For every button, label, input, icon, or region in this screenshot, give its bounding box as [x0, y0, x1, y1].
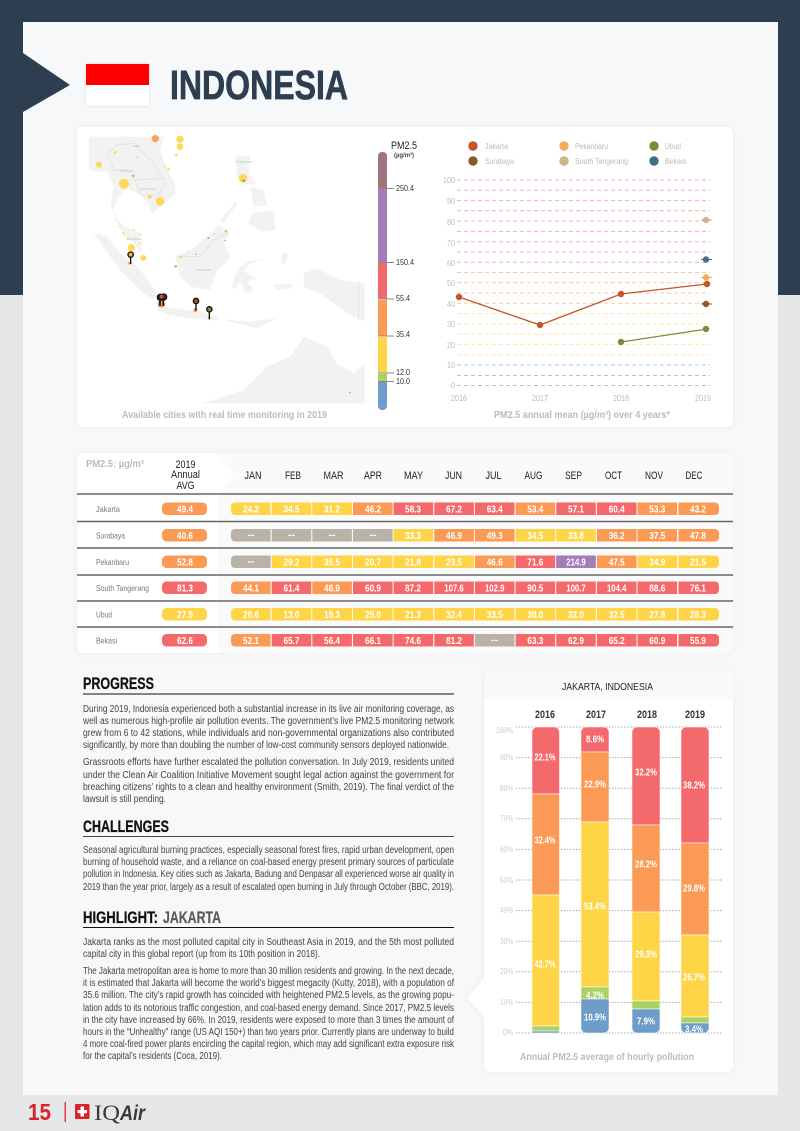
map of Southeast Asia: Cambodia	[139, 187, 155, 191]
row: Ubud: 27.9	[177, 610, 193, 621]
text block: Highlight Jakarta: Jakarta ranks as the most polluted capital city in Southeast Asia in 2019, and the 5th most polluted	[83, 937, 454, 948]
row: Ubud: 20.6	[243, 610, 259, 621]
panel title: JAKARTA, INDONESIA	[562, 681, 653, 693]
line chart: PM2.5 annual mean: 2017	[532, 394, 548, 403]
chart legend: Surabaya	[485, 157, 514, 166]
row: Pekanbaru: 21.5	[690, 558, 706, 568]
chart legend: Ubud	[665, 142, 681, 151]
row: Jakarta: 63.4	[487, 504, 503, 516]
gridlines and percent axis: 0%	[503, 1028, 513, 1037]
stacked bar 2019	[681, 727, 709, 1036]
row: Bekasi	[96, 634, 719, 647]
footer: page number: 15	[28, 1099, 51, 1125]
text block: Challenges: 2019 than the year prior, largely as a result of escalated open burning in July through October (BBC, 2019).	[83, 882, 454, 893]
row: Bekasi: 63.3	[527, 636, 544, 647]
title: INDONESIA	[170, 62, 348, 108]
panel: monthly table	[77, 453, 733, 653]
row: Jakarta: Jakarta	[96, 504, 120, 514]
row: Bekasi: 65.2	[609, 636, 625, 647]
row: Surabaya: 37.5	[649, 531, 666, 542]
gridlines and percent axis: 30%	[500, 937, 513, 946]
text block: Progress: lawsuit is still pending.	[83, 794, 166, 805]
heading: Highlight Jakarta: JAKARTA	[163, 909, 221, 927]
row: Jakarta: 58.3	[405, 504, 421, 516]
logo: IQAir: IQ	[94, 1100, 120, 1125]
row: Ubud: 30.0	[527, 610, 544, 621]
row: Ubud: 33.5	[487, 610, 503, 621]
row: Pekanbaru: 34.9	[649, 558, 666, 568]
row: South Tangerang: 90.5	[527, 584, 544, 594]
footer divider	[64, 1102, 66, 1122]
stacked bar 2017: 10.9%	[584, 1012, 606, 1024]
row: Surabaya: --	[328, 530, 336, 541]
bar chart caption: Annual PM2.5 average of hourly pollution	[520, 1051, 694, 1063]
table column heading: annual average	[171, 459, 200, 492]
row: Ubud: 21.3	[405, 610, 421, 621]
month headings: SEP	[565, 470, 582, 482]
row: South Tangerang: 88.6	[649, 584, 666, 594]
row: South Tangerang: 81.3	[177, 584, 193, 594]
line chart: PM2.5 annual mean: 80	[447, 218, 455, 227]
row: Pekanbaru: 20.7	[365, 558, 381, 568]
month headings: MAR	[324, 470, 344, 482]
heading: Highlight Jakarta	[83, 909, 454, 928]
row: Ubud: 32.0	[568, 610, 584, 621]
stacked bar 2019: 38.2%	[683, 780, 705, 792]
row: Pekanbaru: 52.8	[177, 558, 193, 568]
text block: Challenges: Seasonal agricultural burning practices, especially seasonal forest fires, rapid urban development, open	[83, 845, 454, 856]
header arrow	[23, 53, 70, 112]
icon: Indonesian flag	[86, 64, 149, 106]
PM2.5 colour scale: 250.4	[396, 184, 414, 193]
row: Jakarta: 53.4	[527, 504, 544, 516]
text block: Progress: Grassroots efforts have further escalated the pollution conversation. In July 2019, residents united	[83, 757, 454, 768]
text block: Highlight Jakarta: 4 more coal-fired power plants encircling the capital region, which may add significant extra exposure risk	[83, 1039, 455, 1050]
PM2.5 colour scale: PM2.5	[391, 140, 417, 152]
year headings: 2018	[637, 709, 657, 721]
stacked bar 2018: 7.9%	[637, 1016, 655, 1028]
row: Surabaya: 47.8	[690, 531, 706, 542]
line chart: PM2.5 annual mean: 60	[447, 259, 455, 268]
row: Bekasi: 56.4	[324, 636, 340, 647]
row: South Tangerang: 44.1	[243, 584, 259, 594]
gridlines and percent axis: 40%	[500, 906, 513, 915]
table column heading: annual average: 2019	[176, 459, 196, 471]
row: Jakarta: 31.2	[324, 504, 340, 516]
gridlines and percent axis: 50%	[500, 876, 513, 885]
row: South Tangerang: 87.2	[405, 584, 421, 594]
table column heading: units: PM2.5: µg/m³	[86, 458, 144, 470]
gridlines and percent axis: 100%	[496, 726, 513, 735]
panel header band	[484, 671, 733, 700]
row: South Tangerang: 104.4	[607, 584, 627, 594]
map of Southeast Asia: Philippines	[236, 160, 253, 164]
row: Jakarta: 49.4	[177, 504, 193, 516]
text block: Highlight Jakarta	[83, 937, 455, 1062]
stacked bar 2018: 29.3%	[635, 950, 657, 960]
text block: Highlight Jakarta: for the capital’s residents (Coca, 2019).	[83, 1051, 222, 1062]
row: Jakarta: 34.5	[284, 504, 300, 516]
line chart: PM2.5 annual mean: 90	[447, 197, 455, 206]
row: Ubud	[96, 608, 719, 621]
row: Bekasi: 52.1	[243, 636, 259, 647]
row: South Tangerang	[96, 582, 719, 594]
text block: Highlight Jakarta: in the city have increased by 66%. In 2019, residents were exposed to more than 3 times the amount of	[83, 1015, 454, 1026]
map of Southeast Asia	[89, 135, 365, 403]
row: Jakarta: 57.1	[568, 504, 584, 516]
icon: Swiss flag	[75, 1104, 90, 1119]
month headings: MAY	[404, 470, 424, 482]
table left column	[77, 453, 233, 653]
line chart: PM2.5 annual mean	[443, 176, 712, 403]
row: Surabaya: 34.5	[527, 531, 544, 542]
line chart: PM2.5 annual mean: 70	[447, 239, 455, 248]
line chart: PM2.5 annual mean: 2016	[451, 394, 467, 403]
row: Ubud: 19.3	[324, 610, 340, 621]
row: Bekasi: Bekasi	[96, 636, 117, 646]
row: Ubud: 28.3	[690, 610, 706, 621]
row: Jakarta: 53.3	[649, 504, 666, 516]
chart legend: Pekanbaru	[575, 142, 608, 151]
gridlines and percent axis: 90%	[500, 753, 513, 762]
heading: Progress: PROGRESS	[83, 675, 154, 693]
row separators	[77, 494, 733, 627]
row: Ubud: 27.9	[649, 610, 666, 621]
heading: Challenges: CHALLENGES	[83, 818, 169, 836]
row: South Tangerang: South Tangerang	[96, 583, 149, 593]
row: Pekanbaru: 35.5	[324, 558, 340, 568]
chart legend: Jakarta	[485, 142, 508, 151]
text block: Progress: under the Clean Air Coalition Initiative Movement sought legal action against the government for	[83, 770, 455, 781]
panel background	[467, 671, 733, 1072]
line chart: PM2.5 annual mean: 30	[447, 320, 455, 329]
text block: Progress: breaching citizens’ rights to a clean and healthy environment (Smith, 2019). The final verdict of the	[83, 782, 454, 793]
row: South Tangerang: 60.9	[365, 584, 381, 594]
PM2.5 colour scale: 55.4	[396, 294, 410, 303]
row: Jakarta: 43.2	[690, 504, 706, 516]
stacked bar 2019: 29.8%	[683, 884, 705, 894]
text block: Highlight Jakarta: capital city in this global report (up from its 10th position in 2018).	[83, 949, 320, 960]
row: Ubud: 13.0	[284, 610, 300, 621]
row: Pekanbaru: --	[248, 556, 254, 568]
stacked bar 2017	[581, 727, 609, 1033]
row: Surabaya: --	[248, 530, 254, 541]
text block: Highlight Jakarta: hours in the “Unhealthy” range (US AQI 150+) than two years prior. Currently plans are underway to build	[83, 1027, 454, 1038]
heading: Highlight Jakarta: HIGHLIGHT:	[83, 909, 158, 927]
row: Ubud: 25.0	[365, 610, 381, 621]
text block: Challenges: pollution in Indonesia. Key cities such as Jakarta, Badung and Denpasar all experienced worse air quality in	[83, 869, 454, 880]
PM2.5 colour scale: 12.0	[396, 368, 410, 377]
chart legend: Bekasi	[665, 157, 686, 166]
stacked bar 2016: 22.1%	[534, 752, 556, 764]
text block: Progress: grew from 6 to 42 stations, while individuals and non-governmental organizations also contributed	[83, 728, 454, 739]
row: Jakarta: 67.2	[446, 504, 462, 516]
PM2.5 colour scale: (µg/m³)	[394, 152, 414, 159]
month headings: NOV	[645, 470, 663, 482]
year headings: 2019	[685, 709, 705, 721]
panel: map and annual trend	[77, 127, 733, 427]
stacked bar 2017: 4.2%	[586, 990, 604, 1002]
row: South Tangerang: 107.6	[444, 584, 464, 594]
stacked bar 2018	[632, 727, 660, 1033]
text block: Challenges: burning of household waste, and a reliance on coal-based energy present primary sources of particulate	[83, 857, 454, 868]
page background band	[0, 0, 800, 295]
row: Bekasi: 62.9	[568, 636, 584, 647]
line chart: PM2.5 annual mean: 2018	[613, 394, 629, 403]
PM2.5 colour scale: 35.4	[396, 330, 410, 339]
gridlines and percent axis: 10%	[500, 998, 513, 1007]
row: Surabaya: 36.2	[609, 531, 625, 542]
stacked bar 2019: 3.4%	[685, 1024, 703, 1036]
year headings	[535, 709, 705, 721]
stacked bar 2016: 32.4%	[534, 836, 556, 846]
logo: IQAir	[94, 1100, 147, 1125]
gridlines and percent axis	[496, 726, 722, 1037]
month headings: DEC	[686, 470, 703, 482]
row: Bekasi: 62.6	[177, 636, 193, 647]
month headings: OCT	[605, 470, 622, 482]
chart legend	[468, 141, 686, 166]
text block: Highlight Jakarta: lation adds to its notorious traffic congestion, and coal-based energy demand. Since 2017, PM2.5 levels	[83, 1003, 454, 1014]
year headings: 2016	[535, 709, 555, 721]
text block: Highlight Jakarta: it is estimated that Jakarta will become the world’s biggest megacity (Kutty, 2018), with a population of	[83, 978, 454, 989]
row: Bekasi: 74.6	[405, 636, 421, 647]
month headings: FEB	[285, 470, 301, 482]
stacked bar 2016: 42.7%	[534, 960, 556, 970]
table column heading: annual average: Annual	[171, 469, 200, 481]
line chart: PM2.5 annual mean: 10	[447, 361, 455, 370]
gridlines and percent axis: 80%	[500, 784, 513, 793]
logo: IQAir: Air	[119, 1102, 147, 1125]
row: Bekasi: 65.7	[284, 636, 300, 647]
row: Bekasi: --	[491, 635, 498, 646]
PM2.5 colour scale: 10.0	[396, 377, 410, 386]
month headings: JUN	[445, 470, 462, 482]
chart legend: South Tangerang	[575, 157, 628, 166]
row: South Tangerang: 48.9	[324, 584, 340, 594]
row: Pekanbaru: 21.8	[405, 558, 421, 568]
row: Bekasi: 55.9	[690, 636, 706, 647]
row: South Tangerang: 102.9	[485, 584, 505, 594]
row: Pekanbaru	[96, 556, 719, 568]
row: Bekasi: 81.2	[446, 636, 462, 647]
row: Pekanbaru: 29.2	[284, 558, 300, 568]
text block: Progress	[82, 704, 455, 805]
row: Jakarta: 24.2	[243, 504, 259, 516]
row: Ubud: 32.5	[609, 610, 625, 621]
row: Surabaya: 49.3	[487, 531, 503, 542]
row: Ubud: 32.4	[446, 610, 462, 621]
line chart: PM2.5 annual mean: 50	[447, 279, 455, 288]
row: Surabaya: 33.8	[568, 531, 584, 542]
PM2.5 colour scale: 150.4	[396, 258, 414, 267]
PM2.5 colour scale	[378, 140, 417, 410]
stacked bar 2016	[532, 727, 560, 1033]
row: Pekanbaru: 214.9	[566, 558, 586, 568]
month headings: APR	[364, 470, 382, 482]
text block: Progress: During 2019, Indonesia experienced both a substantial increase in its live air monitoring coverage, as	[83, 704, 454, 715]
stacked bar 2017: 53.4%	[584, 902, 606, 912]
row: Pekanbaru: 23.5	[446, 558, 462, 568]
text block: Challenges	[83, 845, 454, 893]
row: Bekasi: 66.1	[365, 636, 381, 647]
panel background	[77, 127, 733, 427]
stacked bar 2019: 26.7%	[683, 972, 705, 984]
text block: Highlight Jakarta: 35.6 million. The city’s rapid growth has coincided with heightened PM2.5 levels, as the growing popu-	[83, 990, 454, 1001]
map of Southeast Asia: Laos	[132, 144, 140, 148]
row: Surabaya: --	[288, 530, 295, 541]
row: Pekanbaru: 46.6	[487, 558, 503, 568]
row: Surabaya: 33.3	[405, 531, 421, 542]
map of Southeast Asia: Indonesia	[195, 268, 211, 272]
map caption: Available cities with real time monitoring in 2019	[122, 409, 327, 421]
row: Surabaya	[96, 529, 719, 542]
row: Ubud: Ubud	[96, 610, 112, 620]
row: Surabaya: 46.9	[446, 531, 462, 542]
stacked bar 2017: 8.6%	[586, 734, 604, 746]
map of Southeast Asia: Thailand	[119, 169, 133, 173]
city pins on map	[128, 252, 212, 319]
line chart: PM2.5 annual mean: 0	[451, 381, 455, 390]
table column heading: annual average: AVG	[176, 480, 194, 492]
chart caption: PM2.5 annual mean (µg/m³) over 4 years*	[494, 409, 671, 421]
gridlines and percent axis: 60%	[500, 845, 513, 854]
text block: Progress: significantly, by more than doubling the number of low-cost community sensors deployed nationwide.	[83, 740, 449, 751]
gridlines and percent axis: 20%	[500, 967, 513, 976]
row: Jakarta	[96, 502, 719, 516]
row: Pekanbaru: 71.6	[527, 558, 544, 568]
line chart: PM2.5 annual mean: 20	[447, 341, 455, 350]
text block: Highlight Jakarta: The Jakarta metropolitan area is home to more than 30 million residents and growing. In the next decade,	[83, 966, 454, 977]
row: South Tangerang: 100.7	[566, 584, 586, 594]
year headings: 2017	[586, 709, 606, 721]
row: Pekanbaru: Pekanbaru	[96, 557, 129, 567]
row: Bekasi: 60.9	[649, 636, 666, 647]
row: Surabaya: 40.6	[177, 531, 193, 542]
row: Surabaya: --	[370, 530, 376, 541]
row: Jakarta: 60.4	[609, 504, 625, 516]
stacked bar 2017: 22.9%	[584, 780, 606, 790]
text block: Progress: well as numerous high-profile air pollution events. The government’s live PM2.5 monitoring network	[82, 716, 455, 727]
month headings: JAN	[244, 470, 262, 482]
month headings: AUG	[524, 470, 542, 482]
panel: Jakarta hourly pollution stacked bars	[467, 671, 733, 1072]
row: Jakarta: 46.2	[365, 504, 381, 516]
month headings	[244, 470, 703, 482]
stacked bar 2018: 28.2%	[635, 860, 657, 870]
map of Southeast Asia: Malaysia	[128, 237, 142, 241]
line chart: PM2.5 annual mean: 2019	[695, 394, 711, 403]
month headings: JUL	[486, 470, 502, 482]
gridlines and percent axis: 70%	[500, 814, 513, 823]
row: Surabaya: Surabaya	[96, 530, 125, 540]
line chart: PM2.5 annual mean: 100	[443, 176, 455, 185]
line chart: PM2.5 annual mean: 40	[447, 300, 455, 309]
stacked bar 2018: 32.2%	[635, 768, 657, 778]
row: South Tangerang: 76.1	[690, 584, 706, 594]
table background	[77, 453, 733, 653]
row: South Tangerang: 61.4	[284, 584, 300, 594]
row: Pekanbaru: 47.5	[609, 558, 625, 568]
